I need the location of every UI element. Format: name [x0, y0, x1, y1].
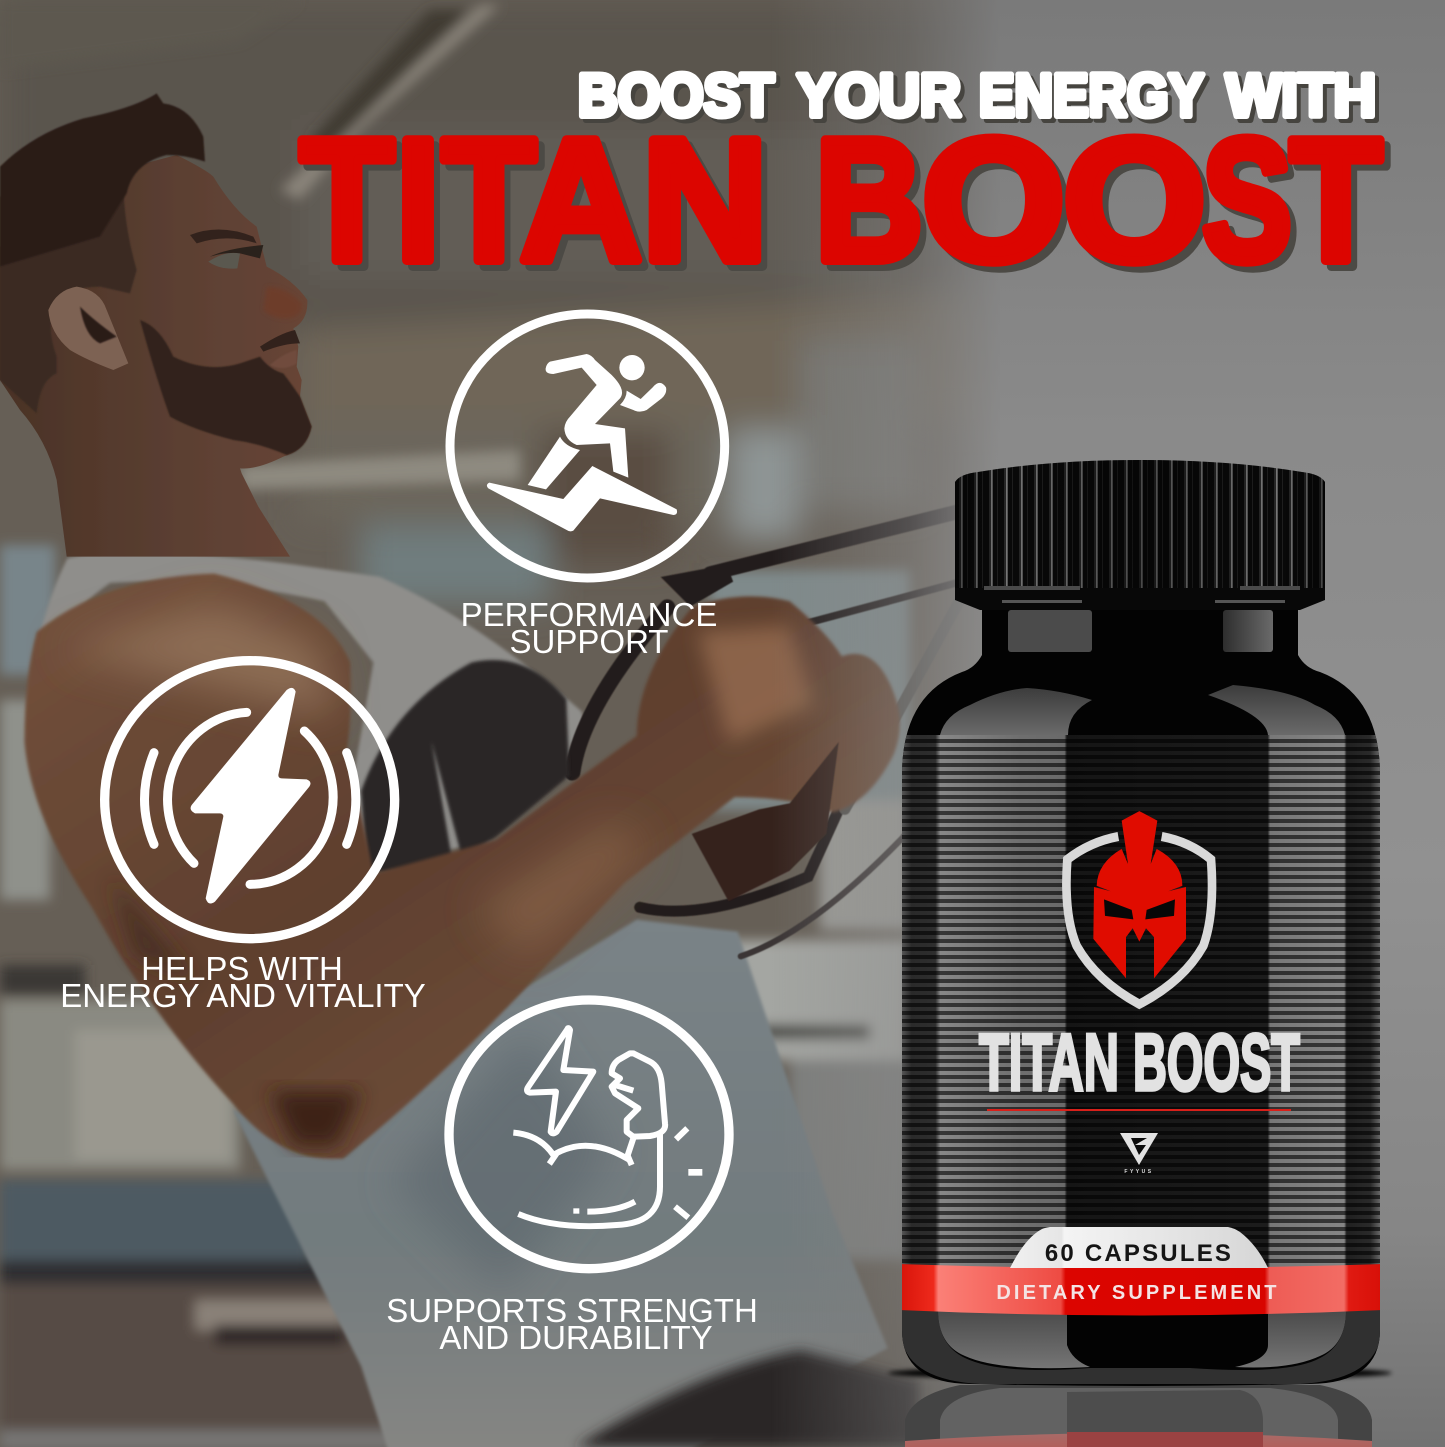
top hair: [0, 93, 205, 267]
eye: [208, 253, 240, 269]
shield logo: [1066, 811, 1212, 1004]
icon: lightning bolt energy: [105, 661, 395, 939]
heading line 2: A: [520, 102, 642, 297]
capsule tab: [1010, 1227, 1268, 1268]
brand mark: [1120, 1133, 1158, 1175]
lips: [270, 350, 297, 368]
striped label: [900, 735, 1382, 1270]
heading line 1: ENERGY: [979, 62, 1204, 129]
neck highlight right: [1223, 610, 1273, 652]
caption: performance support: SUPPORT: [510, 623, 668, 660]
lower shine right: [1235, 1310, 1346, 1368]
heading line 2: O: [1063, 102, 1206, 297]
heading line 2: T: [300, 102, 394, 297]
heading line 1: BOOST: [578, 62, 774, 129]
trousers: [575, 1350, 920, 1447]
ear: [48, 287, 128, 370]
eyebrow: [190, 230, 257, 243]
icon: runner: [450, 314, 725, 578]
neck highlights: [1008, 610, 1092, 652]
heading line 2: N: [642, 102, 768, 297]
neck and head: [0, 93, 312, 557]
eye shadow: [210, 245, 263, 258]
bottle reflection: [905, 1385, 1372, 1447]
heading line 2: S: [1202, 102, 1292, 297]
product: supplement bottle: [888, 460, 1392, 1447]
base edge shine: [902, 1310, 1380, 1384]
grey fade panel on right side: [770, 0, 1445, 1447]
heading line 2: I: [396, 102, 440, 297]
ear inner: [80, 307, 117, 343]
heading line 2: B: [815, 102, 923, 297]
caption: supports strength and durability: AND DURABILITY: [439, 1319, 713, 1356]
strap rings and handles: [572, 506, 980, 956]
heading line 2: O: [922, 102, 1065, 297]
heading line 1: WITH: [1226, 62, 1376, 129]
nose: [263, 287, 302, 319]
tank top and torso: [28, 552, 888, 1447]
shoulder shine right: [1208, 685, 1345, 735]
product name: TITAN: [979, 1018, 1119, 1108]
capsule tab: 60 CAPSULES: [1045, 1240, 1233, 1267]
arm band: [361, 660, 569, 874]
arm and hand: [24, 574, 900, 1159]
heading line 1: YOUR: [797, 62, 961, 129]
glove handle: [692, 742, 839, 901]
brand mark: FYYUS: [1124, 1169, 1154, 1175]
heading line 2: T: [442, 102, 536, 297]
bottle cap: [955, 460, 1325, 610]
dietary supplement: DIETARY SUPPLEMENT: [996, 1282, 1280, 1304]
bottle body: [900, 600, 1382, 1390]
heading line 2: T: [1290, 102, 1382, 297]
product name: BOOST: [1133, 1018, 1300, 1108]
face and neck: [0, 155, 312, 557]
caption: performance support: PERFORMANCE: [461, 596, 717, 633]
beard: [140, 320, 312, 455]
red band: [900, 1264, 1382, 1316]
caption: helps with energy and vitality: HELPS WITH: [141, 950, 343, 987]
red rule: [987, 1109, 1291, 1111]
caption: helps with energy and vitality: ENERGY AND VITALITY: [60, 977, 426, 1014]
shirt shading: [392, 1030, 612, 1293]
arm shading: [61, 601, 814, 1146]
icon: flexed arm with bolt: [449, 1000, 729, 1269]
side fade hair: [0, 180, 137, 413]
man: athlete training with suspension straps: [0, 93, 980, 1447]
heading: [300, 62, 1382, 297]
moustache: [260, 330, 300, 352]
ground shadow: [888, 1366, 1392, 1380]
caption: supports strength and durability: SUPPORTS STRENGTH: [386, 1292, 758, 1329]
shoulder shine left: [940, 688, 1092, 735]
lower shine left: [938, 1310, 1090, 1368]
